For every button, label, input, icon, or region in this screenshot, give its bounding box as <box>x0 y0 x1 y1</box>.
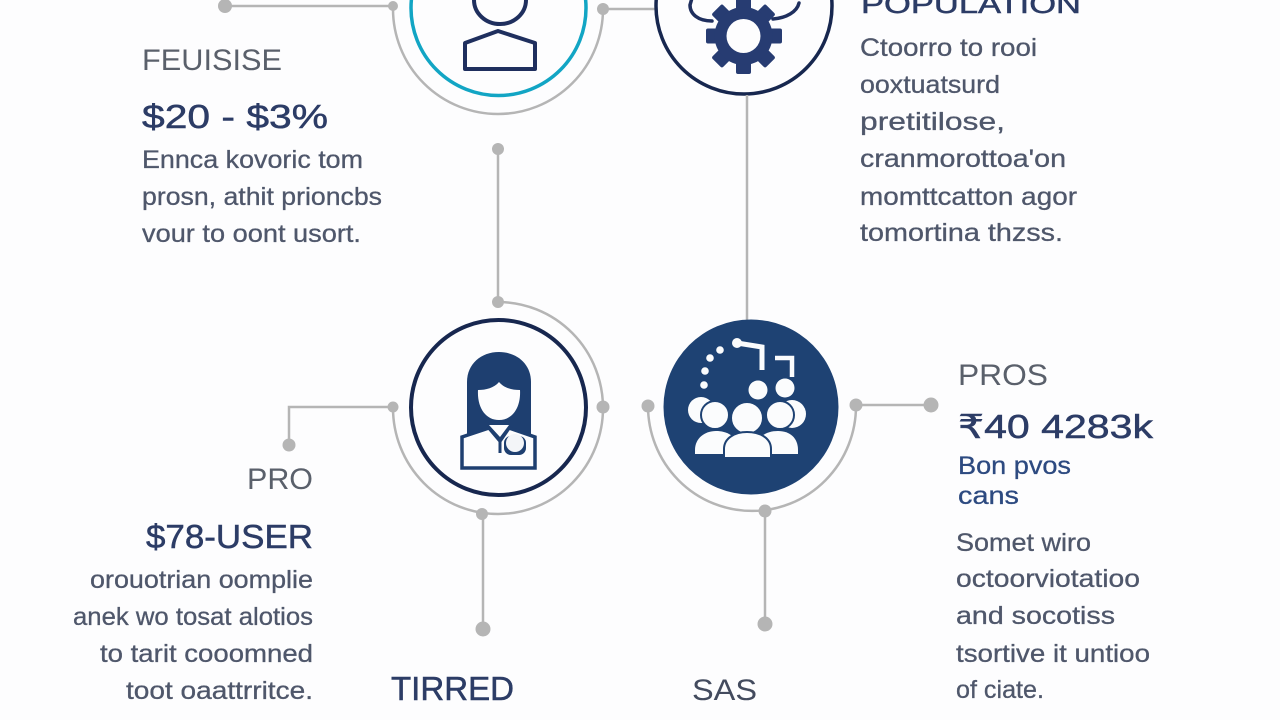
connector: SAS stem <box>758 511 772 632</box>
icon: user outline <box>465 0 535 69</box>
text block: FEUISISE <box>142 44 382 248</box>
text block: PRO: orouotrian oomplie <box>90 566 313 594</box>
text block: POPULATION: ooxtuatsurd <box>860 71 1000 99</box>
text block: PROS: tsortive it untioo <box>956 640 1150 668</box>
text block: POPULATION: momttcatton agor <box>860 183 1077 211</box>
text block: PRO: toot oaattrritce. <box>126 677 313 705</box>
text block: PRO <box>73 463 313 705</box>
node: top-right gear circle <box>656 0 832 94</box>
text block: FEUISISE: FEUISISE <box>142 44 282 77</box>
text block: PROS: PROS <box>958 359 1048 392</box>
icon: people group <box>688 338 806 458</box>
text block: PROS: octoorviotatioo <box>956 565 1140 593</box>
node: top-left user circle <box>218 0 603 114</box>
connector: gear to group <box>746 95 748 320</box>
heading: SAS: SAS <box>692 674 757 707</box>
text block: PROS: cans <box>958 482 1019 510</box>
connector: TIRRED stem <box>476 514 490 636</box>
text block: PRO: to tarit cooomned <box>100 640 313 668</box>
icon: gear with cloud <box>690 0 799 74</box>
text block: PROS: ₹40 4283k <box>958 408 1154 445</box>
connector: upper to doctor <box>492 143 504 302</box>
text block: FEUISISE: vour to oont usort. <box>142 220 361 248</box>
connector: PRO elbow <box>282 407 393 452</box>
text block: PRO: PRO <box>247 463 313 496</box>
node: group circle <box>642 320 862 518</box>
icon: doctor <box>462 352 535 468</box>
text block: PROS: Bon pvos <box>958 452 1071 480</box>
text block: PROS: and socotiss <box>956 602 1115 630</box>
connector: top circles link <box>597 3 656 15</box>
text block: PRO: anek wo tosat alotios <box>73 603 313 631</box>
node: doctor circle <box>388 296 610 520</box>
text block: POPULATION: tomortina thzss. <box>860 219 1063 247</box>
text block: FEUISISE: prosn, athit prioncbs <box>142 183 382 211</box>
text block: POPULATION: pretitilose, <box>860 108 1005 136</box>
text block: FEUISISE: Ennca kovoric tom <box>142 146 363 174</box>
text block: POPULATION: cranmorottoa'on <box>860 145 1066 173</box>
text block: FEUISISE: $20 - $3% <box>142 98 328 135</box>
text block: POPULATION: Ctoorro to rooi <box>860 34 1037 62</box>
connector: PROS stem <box>856 398 938 412</box>
text block: PRO: $78-USER <box>146 518 313 555</box>
heading: TIRRED: TIRRED <box>391 670 514 707</box>
text block: PROS <box>956 359 1154 704</box>
text block: POPULATION <box>860 0 1081 247</box>
text block: PROS: Somet wiro <box>956 529 1091 557</box>
text block: PROS: of ciate. <box>956 676 1044 704</box>
